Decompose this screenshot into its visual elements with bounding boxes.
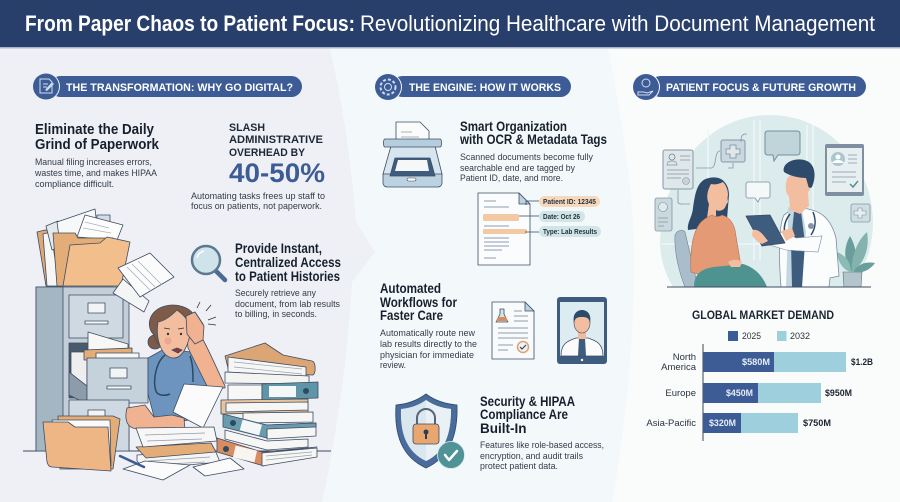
illustration: doctor with patient [655, 115, 875, 287]
illustration: patient [688, 177, 767, 287]
tan binder top [225, 343, 315, 375]
illustration: teal backdrop [660, 115, 873, 287]
text block: security and HIPAA: Features like role-based access, [480, 440, 604, 450]
bar group: North America [661, 352, 873, 373]
illustration: chair [675, 230, 698, 287]
text block: automated workflows: Workflows for [380, 295, 458, 310]
text block: smart organization: searchable end are tagged by [460, 163, 575, 173]
tag: date: Date: Oct 26 [543, 214, 580, 221]
icon: record tablet [825, 144, 864, 196]
illustration: filing cabinet and top folders [36, 209, 148, 451]
illustration: nurse [126, 302, 225, 432]
teal binder [228, 385, 262, 400]
bar group: Asia-Pacific: Asia-Pacific [646, 418, 696, 429]
bar chart: global market demand [646, 308, 873, 441]
icon: lab result document [492, 302, 534, 359]
illustration: doctor [746, 159, 839, 287]
text block: security and HIPAA: protect patient data. [480, 461, 558, 471]
bar group: Europe: Europe [665, 388, 696, 399]
text block: centralized access: document, from lab results [235, 299, 340, 309]
tag: type: Type: Lab Results [543, 229, 597, 236]
illustration: potted plant [837, 232, 875, 287]
tag: patient ID: Patient ID: 12345 [543, 199, 596, 206]
stat callout: overhead 40-50%: ADMINISTRATIVE [229, 134, 323, 146]
bar group: Asia-Pacific [646, 413, 831, 433]
icon: scanned document [478, 193, 530, 265]
panel: middle background [320, 48, 634, 502]
text block: centralized access: Securely retrieve any [235, 288, 316, 298]
stat callout: overhead 40-50%: SLASH [229, 122, 265, 134]
bar group: Europe: $950M [825, 388, 852, 399]
illustration: pen [120, 456, 144, 467]
text block: eliminate paperwork: wastes time, and makes HIPAA [34, 168, 158, 178]
section header: patient focus [632, 73, 866, 101]
text block: eliminate paperwork: Manual filing increases errors, [35, 157, 152, 167]
section header: the engine [374, 73, 571, 101]
icon: patient record card [663, 150, 693, 189]
illustration: flying paper [113, 253, 174, 312]
section header: the engine: THE ENGINE: HOW IT WORKS [409, 82, 561, 94]
text block: smart organization: Scanned documents become fully [460, 152, 593, 162]
section header: the transformation: THE TRANSFORMATION: WHY GO DIGITAL? [66, 82, 293, 94]
text block: automated workflows: physician for immediate [380, 350, 474, 360]
bar group: Europe: $450M [726, 388, 753, 398]
icon: medical cross tile [721, 140, 745, 162]
text block: eliminate paperwork: compliance difficult. [35, 179, 114, 189]
diagram: tagged document [478, 193, 601, 265]
teal binder lower [267, 423, 316, 439]
title bar [0, 0, 900, 48]
text block: smart organization [459, 119, 607, 183]
text block: automated workflows: Automated [380, 281, 441, 296]
text block: smart organization: Smart Organization [460, 119, 567, 134]
bar group: Asia-Pacific: $750M [803, 418, 831, 429]
text block: security and HIPAA: encryption, and audit trails [480, 451, 583, 461]
icon: speech bubble small [746, 182, 770, 202]
icon: speech bubble large [765, 131, 800, 161]
text block: eliminate paperwork [34, 122, 160, 189]
stat callout: overhead 40-50%: focus on patients, not paperwork. [191, 201, 322, 211]
bar group: North America: $580M [742, 357, 770, 367]
text block: security and HIPAA: Built-In [480, 421, 526, 436]
text block: automated workflows: Faster Care [380, 308, 443, 323]
text block: eliminate paperwork: Eliminate the Daily [35, 122, 154, 138]
stat callout: overhead 40-50% [191, 122, 325, 211]
text block: smart organization: with OCR & Metadata Tags [459, 132, 607, 147]
panel: left background [0, 48, 375, 502]
bar group: Asia-Pacific: $320M [709, 418, 736, 428]
orange binder [217, 438, 317, 466]
title bar: From Paper Chaos to Patient Focus: [25, 11, 355, 36]
chart title: GLOBAL MARKET DEMAND [692, 308, 834, 322]
section header: patient focus: PATIENT FOCUS & FUTURE GROWTH [666, 82, 856, 94]
text block: centralized access: to billing, in seconds. [235, 309, 317, 319]
text block: centralized access: to Patient Histories [235, 269, 340, 284]
icon: tablet with physician [557, 297, 607, 364]
illustration: overwhelmed nurse with paper piles [23, 209, 331, 480]
illustration: right binder stack [217, 343, 318, 466]
text block: centralized access: Provide Instant, [235, 241, 322, 256]
section header: the transformation [32, 72, 302, 100]
text block: centralized access [235, 241, 341, 319]
bar group: North America: $1.2B [851, 357, 873, 368]
illustration: central paper stack [123, 427, 244, 480]
stat callout: overhead 40-50%: OVERHEAD BY [229, 147, 306, 159]
bar group: Europe [665, 383, 852, 403]
chart legend [728, 331, 810, 342]
icon: magnifying glass [192, 246, 225, 280]
icon: small cross tile [851, 204, 870, 222]
title bar: Revolutionizing Healthcare with Document Management [360, 11, 875, 36]
stat callout: overhead 40-50%: 40-50% [229, 158, 325, 188]
illustration: open folder [43, 416, 120, 471]
bar group: North America: America [661, 362, 697, 373]
chart legend: 2032 [790, 331, 810, 342]
bar group: North America: North [673, 352, 696, 363]
text block: automated workflows: lab results directly to the [380, 339, 477, 349]
icon: document scanner [383, 122, 442, 187]
icon: security shield [396, 394, 464, 468]
stat callout: overhead 40-50%: Automating tasks frees up staff to [191, 191, 325, 201]
text block: eliminate paperwork: Grind of Paperwork [35, 137, 160, 153]
text block: automated workflows [380, 281, 477, 370]
text block: centralized access: Centralized Access [235, 255, 341, 270]
text block: smart organization: Patient ID, date, and more. [460, 173, 563, 183]
tan binder middle [221, 399, 308, 414]
chart legend: 2025 [742, 331, 761, 342]
text block: automated workflows: review. [380, 360, 406, 370]
text block: security and HIPAA [480, 394, 604, 471]
text block: automated workflows: Automatically route new [380, 328, 475, 338]
text block: security and HIPAA: Compliance Are [480, 407, 568, 422]
text block: security and HIPAA: Security & HIPAA [480, 394, 575, 409]
icon: patient ID card [655, 198, 672, 231]
